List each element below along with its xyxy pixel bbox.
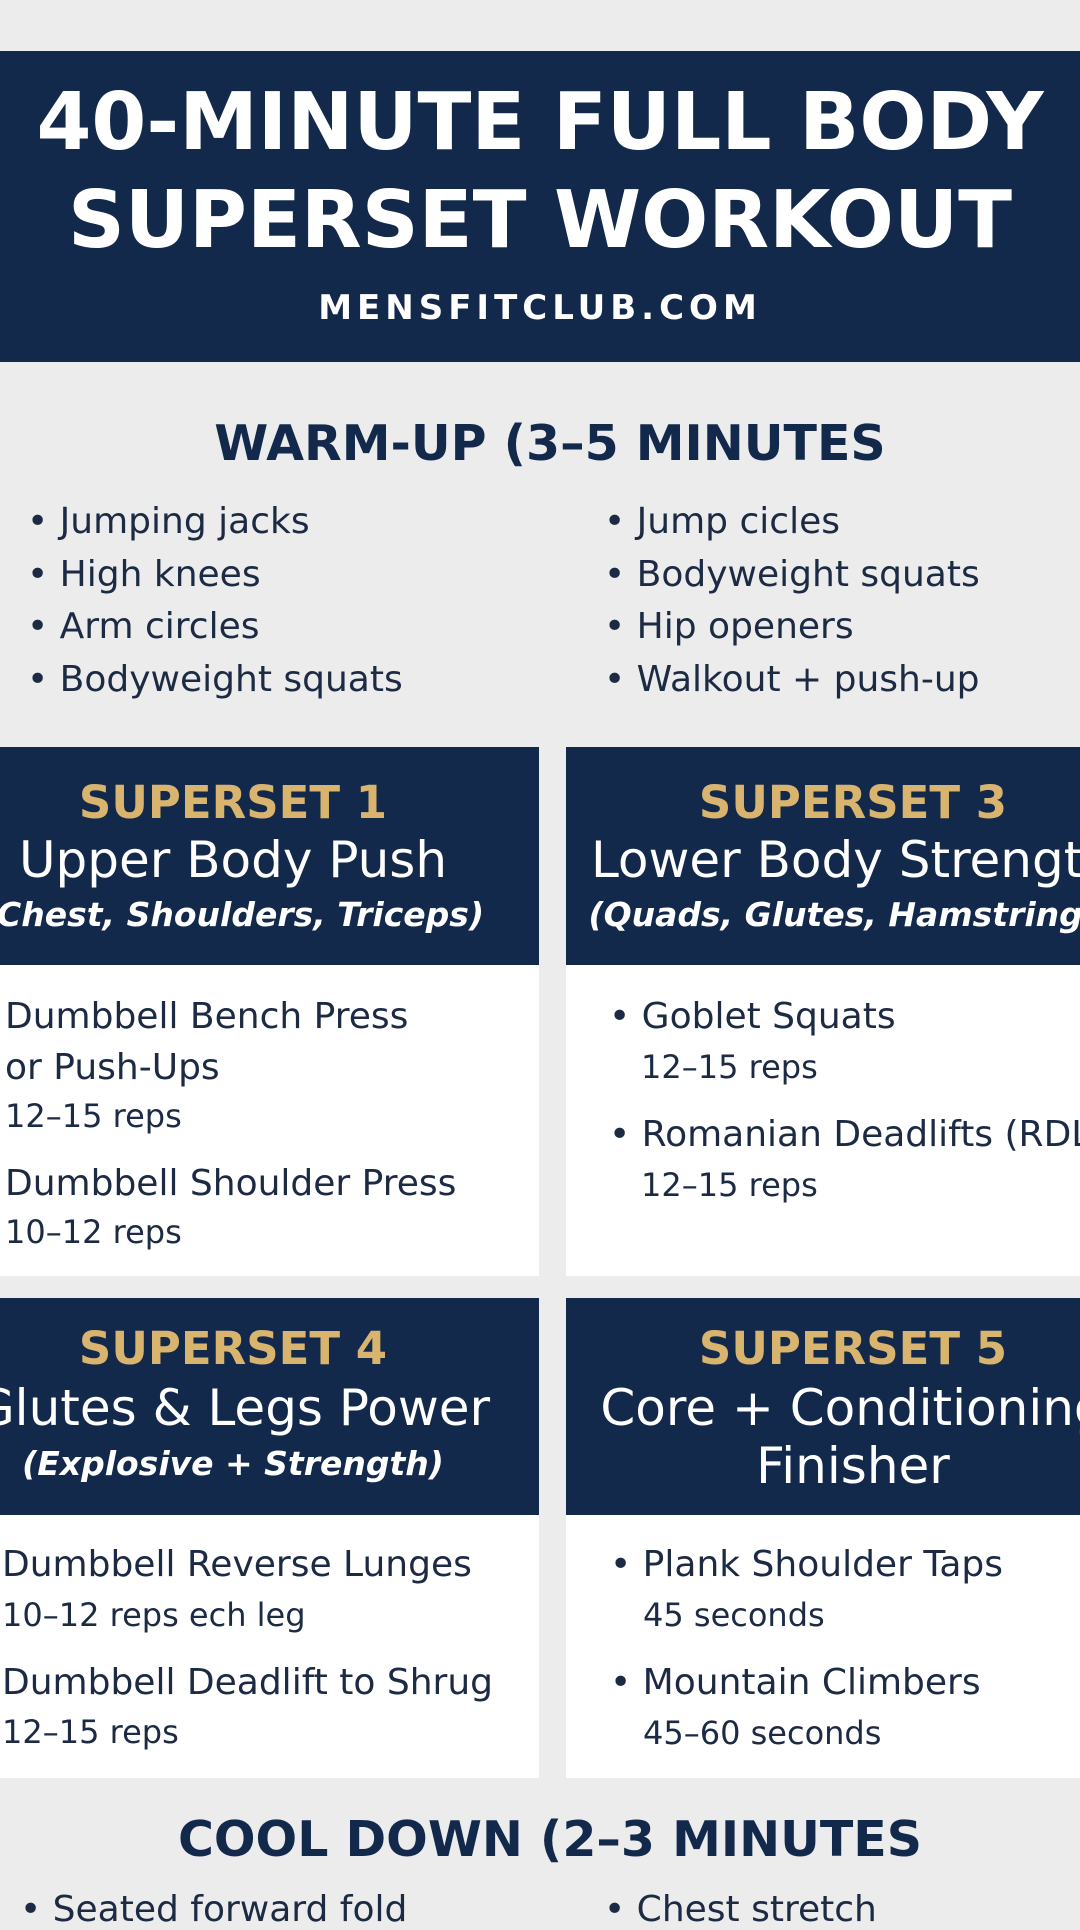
warm-up list right: • Bodyweight squats	[604, 554, 980, 594]
warm-up list left: • High knees	[27, 554, 261, 594]
panel: superset 3: • Goblet Squats	[609, 996, 896, 1037]
panel: superset 5: SUPERSET 5	[699, 1322, 1007, 1375]
panel: superset 4: Dumbbell Deadlift to Shrug	[2, 1662, 493, 1703]
header banner	[0, 51, 1080, 362]
warm-up list right	[604, 501, 980, 700]
warm-up heading: WARM-UP (3–5 MINUTES	[214, 415, 886, 472]
panel: superset 5: Finisher	[756, 1437, 950, 1495]
panel: superset 3: SUPERSET 3	[699, 776, 1007, 829]
warm-up list left	[27, 501, 403, 700]
panel: superset 3	[566, 747, 1080, 1276]
panel: superset 5	[566, 1298, 1080, 1778]
panel: superset 1: Dumbbell Shoulder Press	[5, 1163, 456, 1204]
cool down list: • Seated forward fold	[20, 1889, 407, 1930]
warm-up list left: • Arm circles	[27, 606, 260, 647]
warm-up list right: • Jump cicles	[604, 501, 840, 542]
warm-up list left: • Bodyweight squats	[27, 658, 403, 700]
panel: superset 4	[0, 1298, 539, 1778]
panel: superset 3: 12–15 reps	[641, 1048, 818, 1086]
title	[36, 76, 1044, 266]
panel: superset 4: (Explosive + Strength)	[22, 1444, 444, 1483]
panel: superset 4: 12–15 reps	[2, 1713, 179, 1751]
panel: superset 1: SUPERSET 1	[79, 776, 387, 829]
panel: superset 5: • Plank Shoulder Taps	[610, 1544, 1003, 1585]
panel: superset 1: Upper Body Push	[19, 831, 447, 889]
warm-up list right: • Walkout + push-up	[604, 658, 980, 700]
cool down list right: • Chest stretch	[604, 1889, 877, 1930]
panel: superset 1: or Push-Ups	[5, 1047, 220, 1088]
panel: superset 3: 12–15 reps	[641, 1166, 818, 1204]
panel: superset 4: SUPERSET 4	[79, 1322, 387, 1375]
panel: superset 1: 12–15 reps	[5, 1097, 182, 1135]
title: 40-MINUTE FULL BODY	[36, 76, 1044, 168]
warm-up list left: • Jumping jacks	[27, 501, 310, 542]
panel: superset 1: Dumbbell Bench Press	[5, 996, 408, 1037]
title: SUPERSET WORKOUT	[68, 174, 1012, 266]
panel: superset 1	[0, 747, 539, 1276]
cool down heading: COOL DOWN (2–3 MINUTES	[178, 1811, 922, 1868]
panel: superset 1: 10–12 reps	[5, 1213, 182, 1251]
panel: superset 5: • Mountain Climbers	[610, 1662, 981, 1703]
panel: superset 5: 45–60 seconds	[643, 1714, 881, 1752]
panel: superset 4: 10–12 reps ech leg	[2, 1596, 306, 1634]
warm-up list right: • Hip openers	[604, 606, 854, 647]
panel: superset 4: Dumbbell Reverse Lunges	[2, 1544, 472, 1585]
subtitle: MENSFITCLUB.COM	[318, 288, 762, 328]
panel: superset 5: 45 seconds	[643, 1596, 825, 1634]
